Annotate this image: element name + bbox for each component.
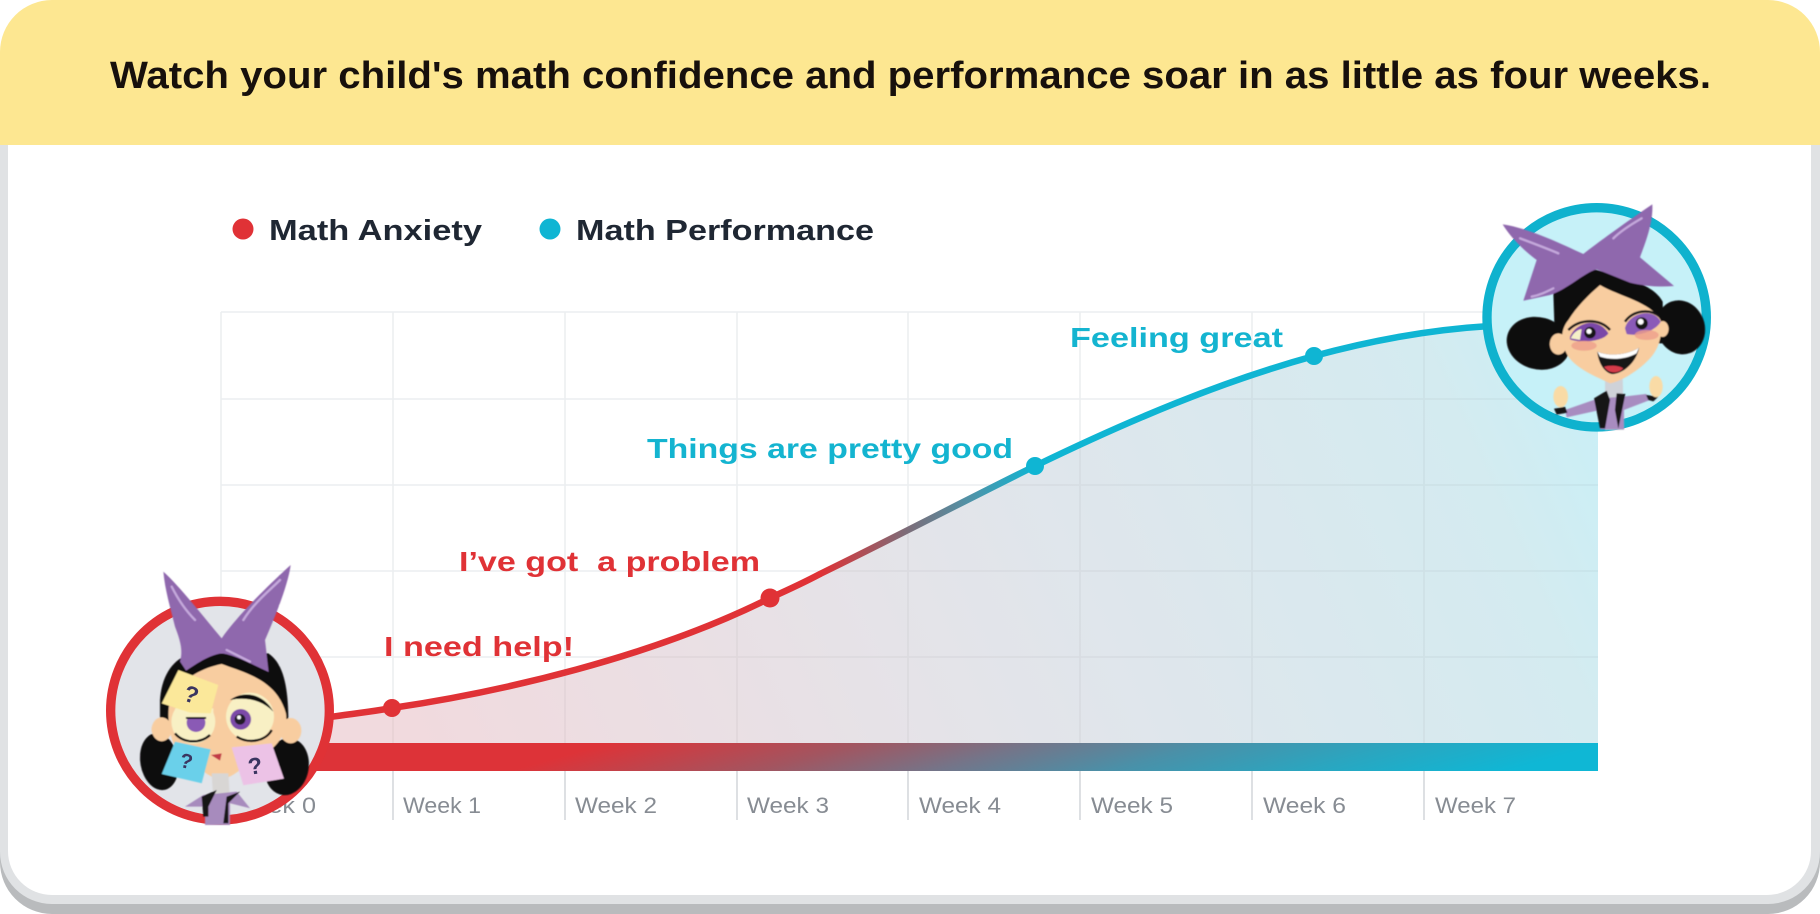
avatar ring <box>111 601 329 820</box>
pigtails <box>136 730 313 799</box>
grid overlay on area <box>393 332 1598 743</box>
hair <box>1553 270 1663 343</box>
week axis labels <box>231 793 1516 818</box>
eyes <box>171 693 274 744</box>
sticky note pink <box>232 743 284 785</box>
title: Watch your child's math confidence and performance soar in as little as four weeks. <box>110 55 1711 97</box>
curve marker: pretty good <box>1026 457 1044 475</box>
chart <box>221 312 1598 820</box>
week axis labels: Week 5 <box>1091 793 1173 818</box>
neck and jacket <box>212 773 230 800</box>
curve marker: I need help <box>383 699 401 717</box>
sticky note yellow <box>162 670 218 713</box>
avatar ring <box>1487 208 1706 427</box>
face <box>168 664 286 780</box>
performance curve: red part <box>330 574 820 717</box>
label: feeling great: Feeling great <box>1070 322 1283 353</box>
hair bow <box>1503 204 1674 301</box>
curve marker: problem <box>760 588 780 608</box>
label: things are pretty good: Things are pretty good <box>647 433 1013 464</box>
icon: anxious girl with sticky notes <box>111 565 329 825</box>
question marks: ? <box>246 752 264 780</box>
legend: math performance: Math Performance <box>576 215 874 247</box>
question marks <box>178 680 264 780</box>
cheeks <box>1571 330 1659 351</box>
hair bow <box>163 565 291 672</box>
chart grid <box>221 312 1598 820</box>
illustration <box>1501 204 1713 430</box>
week axis labels: Week 7 <box>1435 793 1516 818</box>
eyes <box>1568 311 1661 341</box>
week axis labels: Week 4 <box>919 793 1001 818</box>
hair <box>160 653 288 722</box>
legend: math anxiety: Math Anxiety <box>269 215 482 247</box>
question marks: ? <box>178 749 195 774</box>
week axis labels: Week 2 <box>575 793 657 818</box>
ears <box>1550 321 1669 355</box>
curve marker: feeling great <box>1305 347 1323 365</box>
ears <box>152 717 301 743</box>
mouth <box>1597 348 1639 374</box>
label: I've got a problem: I’ve got a problem <box>459 546 760 577</box>
neck and arms <box>1553 376 1663 430</box>
performance curve: transition and blue part <box>820 466 1035 574</box>
week axis labels: Week 1 <box>403 793 481 818</box>
question marks: ? <box>180 680 202 709</box>
week axis labels: Week 6 <box>1263 793 1346 818</box>
legend <box>232 215 874 247</box>
area under curve <box>330 322 1598 743</box>
illustration <box>136 565 313 825</box>
performance curve: blue part <box>1035 326 1490 466</box>
face <box>1562 285 1661 383</box>
mouth <box>211 753 222 761</box>
icon: happy girl <box>1487 204 1713 430</box>
sticky note blue <box>162 742 211 783</box>
label: I need help: I need help! <box>384 631 574 662</box>
week axis labels: Week 0 <box>231 793 316 818</box>
header banner <box>0 0 1820 145</box>
pigtails <box>1501 293 1713 377</box>
week axis labels: Week 3 <box>747 793 829 818</box>
baseline gradient bar <box>310 743 1598 771</box>
hands <box>1553 386 1568 407</box>
